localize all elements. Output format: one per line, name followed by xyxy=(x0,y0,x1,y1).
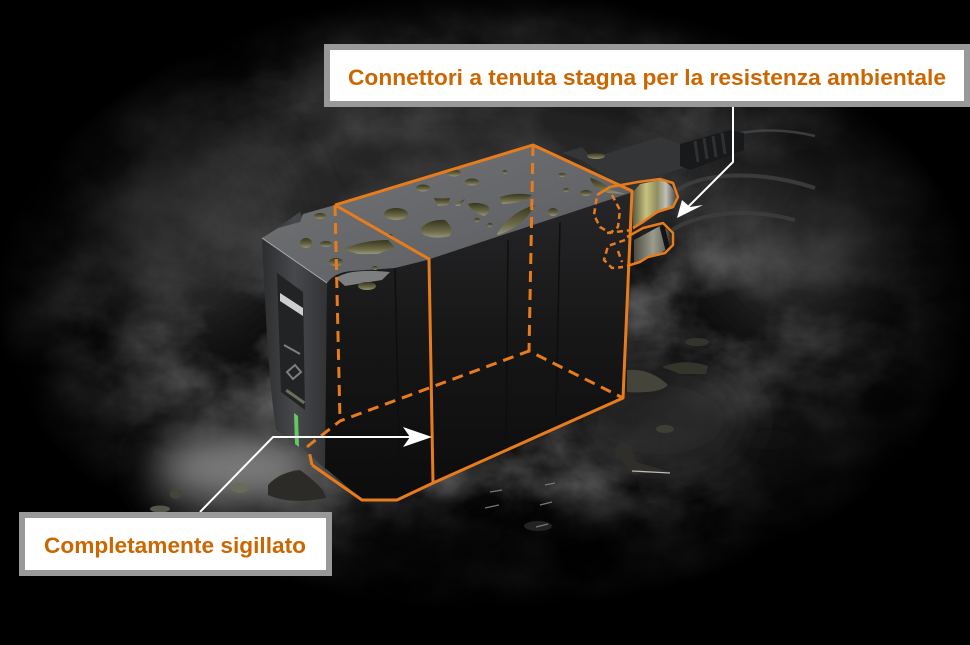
device front face xyxy=(262,212,327,470)
device top face xyxy=(262,146,633,283)
front display panel xyxy=(277,273,305,410)
connector outlines xyxy=(597,179,678,266)
connector dashed loops xyxy=(594,195,632,268)
callout: sealed body: Completamente sigillato xyxy=(44,533,306,558)
icon: upper waterproof connector xyxy=(633,180,677,230)
icon: lower waterproof connector xyxy=(634,226,672,264)
floor highlight xyxy=(153,430,323,506)
callout: connectors: Connettori a tenuta stagna per la resistenza ambientale xyxy=(348,65,946,90)
icon: rear connector block xyxy=(562,137,683,182)
callout: sealed body xyxy=(22,515,329,573)
pointer line: sealed body xyxy=(200,427,432,512)
callout: connectors xyxy=(327,47,967,104)
dashed hidden edges xyxy=(308,145,623,465)
orange sealed-box outline xyxy=(308,145,678,500)
cables and rear connector xyxy=(562,130,815,264)
pointer line: connectors xyxy=(677,107,733,218)
device body xyxy=(262,146,633,499)
puddles on floor xyxy=(150,338,709,531)
device side face xyxy=(325,192,633,499)
solid edges xyxy=(312,145,632,500)
water droplets on top face xyxy=(300,153,625,290)
